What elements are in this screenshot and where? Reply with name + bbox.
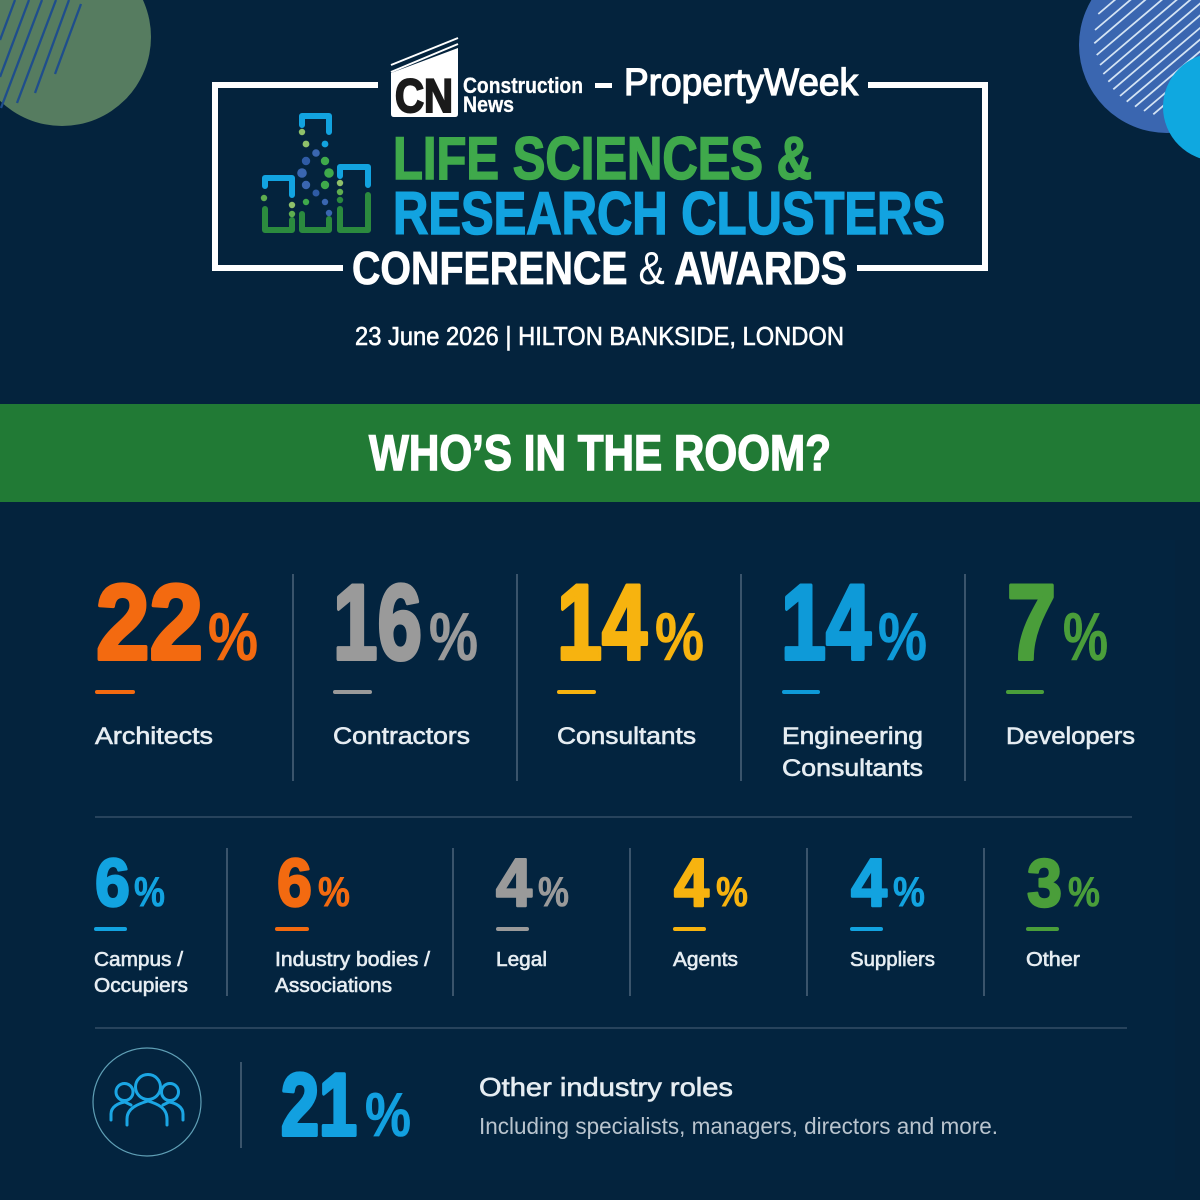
other industry roles text: Other industry roles bbox=[479, 1072, 733, 1102]
stat: 14% Consultants: 14 bbox=[557, 562, 647, 682]
stat: 4% Agents: % bbox=[716, 868, 748, 915]
stat: 14% Consultants: % bbox=[655, 599, 704, 675]
stat: 21%: 21 bbox=[281, 1055, 357, 1154]
heading: Life Sciences &: LIFE SCIENCES & bbox=[393, 125, 812, 192]
stat: 3% Other bbox=[1026, 845, 1100, 971]
stat: 6% Campus / Occupiers: 6 bbox=[95, 845, 130, 921]
stat: 21%: % bbox=[365, 1081, 411, 1150]
stat: 22% Architects: % bbox=[208, 599, 258, 675]
stat: 4% Legal bbox=[496, 845, 569, 971]
heading: Conference & Awards: CONFERENCE & AWARDS bbox=[352, 242, 847, 294]
stat: 3% Other: Other bbox=[1026, 949, 1080, 971]
stat: 6% Industry bodies / Associations: Associations bbox=[275, 975, 392, 997]
stat: 4% Legal: % bbox=[538, 868, 569, 915]
stat: 7% Developers: 7 bbox=[1007, 562, 1056, 682]
heading: Research Clusters: RESEARCH CLUSTERS bbox=[393, 180, 945, 247]
stat: 4% Suppliers: 4 bbox=[851, 845, 887, 921]
stat: 4% Legal: Legal bbox=[496, 949, 547, 971]
stat: 4% Suppliers: Suppliers bbox=[850, 949, 935, 971]
stat: 3% Other: 3 bbox=[1027, 845, 1062, 921]
stat: 14% Engineering Consultants bbox=[781, 562, 927, 782]
stat: 7% Developers: Developers bbox=[1006, 723, 1135, 750]
logo: Construction News bbox=[391, 38, 583, 122]
icon: research cluster buildings bbox=[261, 116, 368, 230]
stat: 6% Campus / Occupiers bbox=[94, 845, 188, 997]
stat: 7% Developers bbox=[1006, 562, 1135, 750]
icon: CN roof mark: CN bbox=[395, 69, 453, 122]
stat: 4% Legal: 4 bbox=[496, 845, 532, 921]
event logo frame bbox=[215, 85, 985, 268]
wordmark: Construction: Construction bbox=[463, 73, 583, 98]
stat: 4% Suppliers bbox=[850, 845, 935, 971]
stat: 6% Campus / Occupiers: Campus / bbox=[94, 949, 183, 971]
stat: 6% Industry bodies / Associations: 6 bbox=[277, 845, 312, 921]
stat: 16% Contractors: % bbox=[429, 599, 478, 675]
stat: 3% Other: % bbox=[1068, 868, 1100, 915]
icon: group of people in circle bbox=[93, 1048, 201, 1156]
stat: 7% Developers: % bbox=[1063, 599, 1108, 675]
stat: 6% Campus / Occupiers: Occupiers bbox=[94, 975, 188, 997]
stat: 14% Engineering Consultants: Consultants bbox=[782, 755, 923, 782]
stat: 14% Engineering Consultants: 14 bbox=[781, 562, 871, 682]
stat: 14% Engineering Consultants: % bbox=[878, 599, 927, 675]
decorative circles: top right blue with stripes bbox=[1079, 0, 1200, 161]
icon: CN roof mark bbox=[391, 38, 458, 122]
wordmark: News: News bbox=[463, 92, 514, 117]
other industry roles text bbox=[479, 1072, 998, 1139]
stat: 6% Industry bodies / Associations: % bbox=[318, 868, 350, 915]
decorative circle: top left green with stripes bbox=[0, 0, 151, 126]
stat: 22% Architects: 22 bbox=[96, 562, 203, 682]
section banner bbox=[0, 404, 1200, 502]
stat: 14% Engineering Consultants: Engineering bbox=[782, 723, 923, 750]
stat: 6% Industry bodies / Associations: Industry bodies / bbox=[275, 949, 430, 971]
date and venue: 23 June 2026 | HILTON BANKSIDE, LONDON bbox=[355, 321, 844, 351]
stat: 6% Campus / Occupiers: % bbox=[134, 868, 165, 915]
stat: 4% Agents: Agents bbox=[673, 949, 738, 971]
stat: 14% Consultants: Consultants bbox=[557, 723, 696, 750]
logo: Property Week: PropertyWeek bbox=[624, 62, 859, 104]
stat: 14% Consultants bbox=[557, 562, 704, 750]
stat: 16% Contractors: 16 bbox=[333, 562, 422, 682]
other industry roles text: Including specialists, managers, directors and more. bbox=[479, 1113, 998, 1139]
dash between logos bbox=[595, 83, 612, 88]
stat: 4% Agents: 4 bbox=[674, 845, 709, 921]
stat: 4% Agents bbox=[673, 845, 748, 971]
stat: 4% Suppliers: % bbox=[893, 868, 925, 915]
stat: 16% Contractors: Contractors bbox=[333, 723, 470, 750]
stat: 22% Architects: Architects bbox=[95, 723, 213, 750]
stats panel background bbox=[40, 540, 1175, 1180]
stat: 16% Contractors bbox=[333, 562, 478, 750]
stat: 6% Industry bodies / Associations bbox=[275, 845, 430, 997]
stat: 22% Architects bbox=[95, 562, 258, 750]
banner heading: WHO’S IN THE ROOM? bbox=[369, 425, 831, 481]
